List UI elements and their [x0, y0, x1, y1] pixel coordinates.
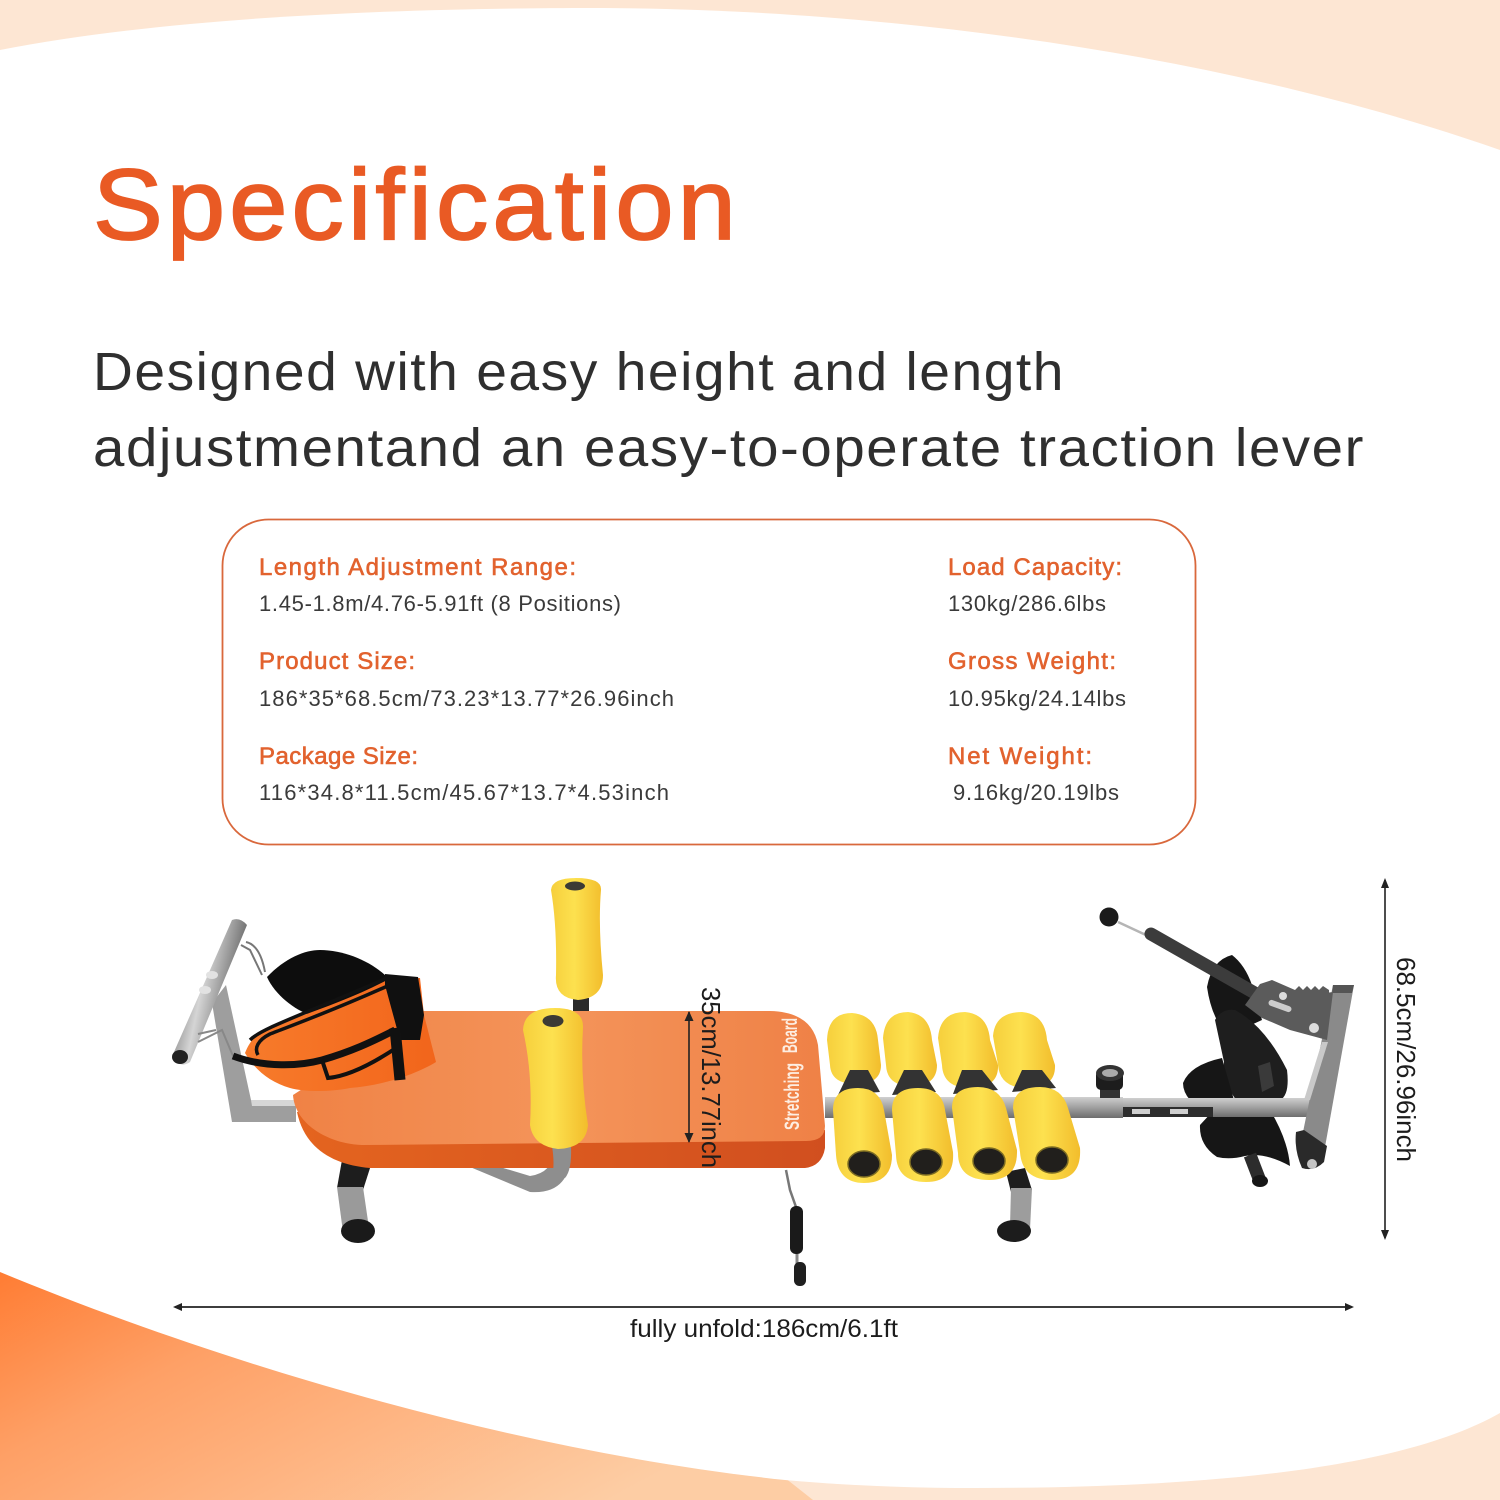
- spec: length adjustment range: 1.45-1.8m/4.76-5.91ft (8 Positions): [259, 591, 621, 616]
- pull cord and grip: [786, 1170, 806, 1286]
- spec: product size: [259, 648, 674, 711]
- dimension: full length: fully unfold:186cm/6.1ft: [630, 1315, 898, 1343]
- spec: product size: Product Size:: [259, 648, 415, 675]
- panel: specifications: [222, 520, 1196, 844]
- spec: load capacity: 130kg/286.6lbs: [948, 591, 1106, 616]
- spec: package size: [259, 743, 669, 805]
- spec: net weight: 9.16kg/20.19lbs: [953, 780, 1119, 805]
- rear leg: [337, 1160, 375, 1243]
- rear yellow handle: [551, 878, 603, 1012]
- metal handle bend: [470, 1148, 571, 1192]
- spec: product size: 186*35*68.5cm/73.23*13.77*26.96inch: [259, 686, 674, 711]
- board branding: Stretching: [781, 1063, 804, 1130]
- spec: gross weight: 10.95kg/24.14lbs: [948, 686, 1126, 711]
- spec: load capacity: [948, 554, 1122, 616]
- subtitle: [93, 342, 1365, 478]
- background: orange corner swoosh: [0, 1260, 813, 1500]
- spec: package size: Package Size:: [259, 743, 418, 770]
- black spiral rollers: [1183, 955, 1290, 1187]
- traction lever: [1100, 908, 1333, 1040]
- metal handle over board side: [552, 1146, 571, 1178]
- rollers: rear row: [827, 1012, 1056, 1095]
- right leg: [997, 1168, 1032, 1242]
- front yellow handle: [523, 1008, 588, 1149]
- neck harness: [233, 950, 436, 1091]
- foot-end post: [1296, 985, 1354, 1169]
- dimension: board width: 35cm/13.77inch: [696, 987, 726, 1168]
- spec: net weight: [948, 743, 1119, 805]
- spec: load capacity: Load Capacity:: [948, 554, 1122, 581]
- head-end frame: [172, 919, 296, 1122]
- dimension: height: 68.5cm/26.96inch: [1391, 957, 1421, 1162]
- board top: [293, 1011, 825, 1145]
- spec: package size: 116*34.8*11.5cm/45.67*13.7*4.53inch: [259, 780, 669, 805]
- spec: net weight: Net Weight:: [948, 743, 1092, 770]
- spec: length adjustment range: [259, 554, 621, 616]
- spec: length adjustment range: Length Adjustment Range:: [259, 554, 576, 581]
- adjustment knob: [1096, 1065, 1124, 1098]
- board branding: Board: [779, 1018, 802, 1053]
- telescoping rail: [825, 1097, 1313, 1118]
- rollers: front row: [833, 1087, 1080, 1183]
- product illustration: stretching board: [172, 878, 1354, 1286]
- spec: gross weight: [948, 648, 1126, 711]
- spec: gross weight: Gross Weight:: [948, 648, 1116, 675]
- subtitle: adjustmentand an easy-to-operate traction lever: [93, 418, 1365, 478]
- board side: [297, 1110, 825, 1168]
- dimension: height: [1381, 878, 1421, 1240]
- subtitle: Designed with easy height and length: [93, 342, 1065, 402]
- dimension: full length: [173, 1303, 1354, 1343]
- title: Specification: [93, 149, 740, 261]
